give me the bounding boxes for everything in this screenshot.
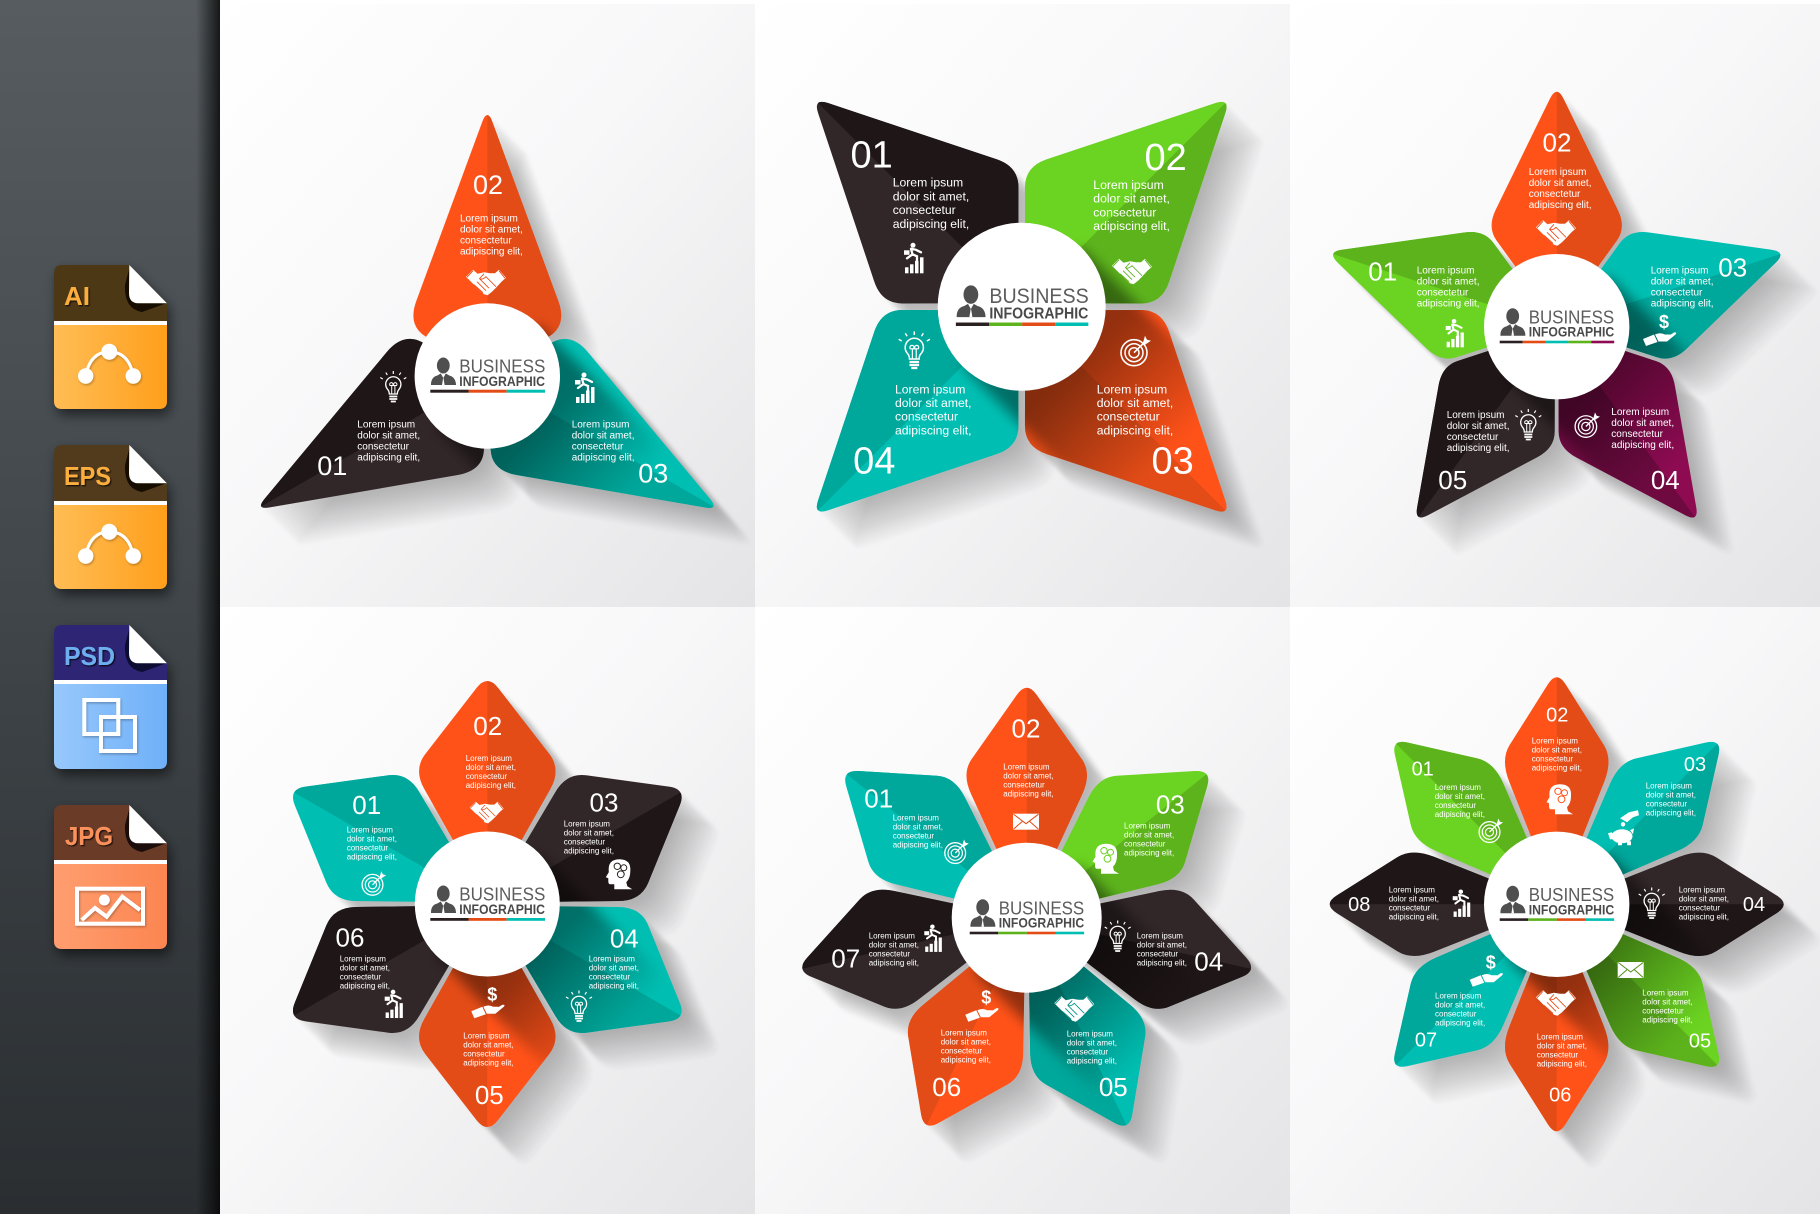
step 01: dolor sit amet, [357,430,420,441]
step 02: consectetur [1003,780,1045,789]
center badge [938,223,1106,391]
petal 02 [1505,677,1608,901]
petal 03 [456,733,715,962]
step 03: consectetur [1646,799,1687,808]
step 05: consectetur [1642,1007,1684,1016]
step 01: dolor sit amet, [1417,276,1480,287]
step 04: dolor sit amet, [589,963,639,972]
step 05: Lorem ipsum [1447,410,1505,421]
step 08: 08 [1348,894,1370,916]
step 05: adipiscing elit, [463,1058,514,1067]
step 05: dolor sit amet, [1447,421,1510,432]
step 03: consectetur [572,441,624,452]
step 03 [1608,754,1706,845]
step 06: adipiscing elit, [1537,1059,1587,1068]
diagram: 6 steps [293,681,715,1160]
step 02: Lorem ipsum [1003,762,1050,771]
petal 05 [1366,291,1608,555]
step 07: dolor sit amet, [1435,1001,1485,1010]
petal 07 [789,860,1037,1028]
petal 06 [1505,907,1608,1131]
step 06 [1536,990,1587,1107]
step 01: dolor sit amet, [347,834,397,843]
panel background: 6 steps [220,607,755,1214]
center badge: BUSINESS [989,284,1089,308]
petal 05 [974,894,1181,1151]
step 04: Lorem ipsum [589,954,635,963]
petal 06 [260,846,519,1075]
step 02 [1529,128,1592,246]
step 02: 02 [1012,714,1040,744]
petal 01 [224,312,524,571]
step 01: adipiscing elit, [1417,298,1480,309]
step 07: Lorem ipsum [1435,992,1482,1001]
center badge: INFOGRAPHIC [1529,902,1614,917]
step 05: adipiscing elit, [1447,443,1510,454]
step 06: Lorem ipsum [941,1029,987,1038]
step 02: adipiscing elit, [466,781,516,790]
petal 02 [419,681,556,901]
file icon: AI: AI [64,281,90,311]
step 02: Lorem ipsum [1529,167,1587,178]
step 01 [347,790,397,895]
step 06 [932,988,999,1102]
step 01 [864,784,969,864]
step 03: 03 [1152,440,1194,482]
step 01: adipiscing elit, [1435,810,1485,819]
step 01: adipiscing elit, [347,852,397,861]
step 04: consectetur [1679,903,1720,912]
step 03 [564,788,632,889]
step 06: dolor sit amet, [340,963,390,972]
diagram: 7 steps [802,688,1284,1159]
step 01 [1368,257,1480,347]
step 04: dolor sit amet, [1137,941,1187,950]
step 06: 06 [932,1072,961,1102]
center badge [415,303,560,449]
file icon: JPG: JPG [65,821,113,851]
file icon: JPG [54,805,167,949]
step 02: 02 [1546,705,1568,727]
step 02: adipiscing elit, [1003,789,1054,798]
step 06: Lorem ipsum [1537,1032,1583,1041]
step 02 [460,170,523,295]
step 04: adipiscing elit, [1137,959,1187,968]
step 01: consectetur [893,203,956,217]
petal 06 [873,894,1080,1151]
step 03: consectetur [1124,840,1166,849]
step 01 [851,134,969,273]
step 01: consectetur [1417,287,1469,298]
step 03: Lorem ipsum [1124,822,1171,831]
step 01: 01 [851,134,893,176]
petal 03 [1522,707,1754,939]
petal 02 [413,115,561,376]
step 03: 03 [590,788,618,818]
petal 05 [1522,870,1754,1101]
step 05: 05 [1689,1030,1711,1052]
step 01: 01 [864,784,893,814]
step 02: Lorem ipsum [460,214,518,225]
step 05 [1618,962,1711,1052]
step 02: dolor sit amet, [460,225,523,236]
step 04 [1105,920,1223,977]
step 06: consectetur [340,972,381,981]
step 02: 02 [473,711,502,741]
center badge: BUSINESS [459,356,545,377]
step 07: dolor sit amet, [869,941,919,950]
center badge: INFOGRAPHIC [459,902,545,917]
step 02: adipiscing elit, [460,247,523,258]
step 04: adipiscing elit, [1679,912,1729,921]
step 01: consectetur [1435,801,1476,810]
step 02: consectetur [460,236,512,247]
step 07 [1415,953,1503,1052]
petal 04 [1560,853,1784,956]
step 04 [1575,407,1680,495]
step 02: consectetur [1532,755,1573,764]
petal 01 [1313,192,1574,388]
diagram: 5 steps [1333,92,1812,550]
step 03: 03 [1156,789,1185,819]
center badge: BUSINESS [459,884,545,905]
step 02: dolor sit amet, [1532,746,1582,755]
step 03 [1097,336,1194,482]
step 06: 06 [1549,1085,1571,1107]
petal 03 [450,312,750,571]
step 02: 02 [1543,128,1571,158]
step 03: adipiscing elit, [1651,298,1714,309]
step 01: Lorem ipsum [893,814,939,823]
step 04: 04 [1651,465,1680,495]
step 01: dolor sit amet, [893,189,969,203]
step 05: 05 [1099,1072,1128,1102]
step 04: consectetur [895,410,958,424]
step 06: dolor sit amet, [941,1038,991,1047]
step 05: dolor sit amet, [1642,998,1693,1007]
petal 03 [961,246,1290,575]
step 01: dolor sit amet, [893,823,943,832]
step 03 [1092,789,1185,874]
step 04: 04 [853,440,895,482]
step 04 [1639,885,1765,921]
step 06: consectetur [1537,1050,1578,1059]
panel background: 8 steps [1290,607,1820,1214]
step 04: dolor sit amet, [895,396,972,410]
diagram: 4 steps [816,102,1260,545]
step 04: Lorem ipsum [1611,407,1669,418]
step 01: 01 [317,451,347,481]
petal 03 [991,727,1244,963]
step 08: consectetur [1389,903,1430,912]
step 08 [1348,885,1470,921]
step 01: Lorem ipsum [347,825,393,834]
step 07: adipiscing elit, [1435,1019,1485,1028]
step 03: 03 [638,458,668,488]
petal 04 [754,246,1082,575]
step 07: consectetur [869,950,910,959]
step 03: adipiscing elit, [1646,808,1696,817]
step 02: consectetur [1093,205,1156,219]
step 04: adipiscing elit, [589,981,639,990]
step 01: 01 [1412,758,1434,780]
step 03: adipiscing elit, [1124,849,1174,858]
petal 08 [1330,853,1554,956]
step 02: adipiscing elit, [1529,200,1592,211]
step 05 [1054,996,1128,1102]
step 03: adipiscing elit, [564,847,614,856]
petal 02 [961,39,1290,367]
step 04: dolor sit amet, [1611,418,1674,429]
step 03: dolor sit amet, [572,430,635,441]
file icon: AI [54,265,167,409]
step 04: consectetur [1137,950,1178,959]
petal 02 [1492,92,1622,324]
step 03: adipiscing elit, [1097,423,1173,437]
step 03: Lorem ipsum [1097,382,1167,396]
step 03: 03 [1718,253,1747,283]
step 04: adipiscing elit, [1611,440,1674,451]
step 08: dolor sit amet, [1389,894,1439,903]
petal 04 [1016,860,1264,1028]
step 02 [1003,714,1054,830]
step 03: consectetur [1651,287,1703,298]
step 05: consectetur [1067,1048,1108,1057]
center badge: BUSINESS [999,897,1084,918]
step 07 [831,924,942,974]
step 05 [1438,409,1541,495]
step 06 [336,923,403,1018]
step 01: consectetur [347,843,388,852]
step 04: 04 [1194,947,1223,977]
step 03 [1643,253,1747,346]
step 06: adipiscing elit, [941,1056,991,1065]
step 06: Lorem ipsum [340,954,386,963]
step 04: Lorem ipsum [1137,932,1183,941]
step 02: dolor sit amet, [1003,771,1054,780]
step 02: dolor sit amet, [466,763,516,772]
panel background: 3 steps [220,4,755,607]
step 07: Lorem ipsum [869,932,915,941]
step 04: adipiscing elit, [895,423,972,437]
center badge: BUSINESS [1529,884,1614,905]
step 03: Lorem ipsum [1651,265,1709,276]
step 02 [466,711,516,823]
step 08: adipiscing elit, [1389,912,1439,921]
step 05: Lorem ipsum [463,1031,510,1040]
step 02: consectetur [1529,189,1581,200]
step 01: consectetur [893,832,934,841]
step 05: Lorem ipsum [1642,989,1689,998]
petal 01 [1360,707,1591,939]
step 03: Lorem ipsum [572,419,630,430]
step 06: consectetur [941,1047,982,1056]
step 06: adipiscing elit, [340,981,390,990]
step 01: dolor sit amet, [1435,792,1485,801]
diagram: 3 steps [261,115,746,542]
step 01: adipiscing elit, [357,452,420,463]
step 01: Lorem ipsum [893,176,963,190]
center badge [1484,832,1629,977]
petal 07 [1360,870,1591,1101]
step 02: adipiscing elit, [1093,219,1170,233]
step 05: consectetur [463,1049,505,1058]
step 02: adipiscing elit, [1532,764,1582,773]
step 01: Lorem ipsum [357,419,415,430]
step 01 [317,371,420,481]
center badge: INFOGRAPHIC [459,374,545,389]
step 04: consectetur [1611,429,1664,440]
panel background: 7 steps [755,607,1290,1214]
diagram: 8 steps [1330,677,1820,1167]
step 04: 04 [1743,894,1765,916]
step 08: Lorem ipsum [1389,885,1435,894]
file icon: PSD [54,625,167,769]
step 02: 02 [1145,137,1187,179]
step 03: consectetur [564,838,605,847]
step 05: dolor sit amet, [463,1040,514,1049]
step 07: consectetur [1435,1010,1477,1019]
step 03: dolor sit amet, [564,829,614,838]
file icon: EPS: EPS [64,461,111,491]
step 05 [463,984,514,1110]
center badge: BUSINESS [1529,306,1614,327]
step 07: adipiscing elit, [869,959,919,968]
step 01: Lorem ipsum [1435,783,1481,792]
step 03: 03 [1684,754,1706,776]
step 06: dolor sit amet, [1537,1041,1587,1050]
sidebar [0,0,220,1214]
panel background: 5 steps [1290,4,1820,607]
step 02: dolor sit amet, [1529,178,1592,189]
step 02: consectetur [466,772,507,781]
step 03: dolor sit amet, [1646,790,1696,799]
panel background: 4 steps [755,4,1290,607]
step 05: 05 [475,1080,504,1110]
petal 01 [809,727,1062,963]
step 03: consectetur [1097,410,1160,424]
step 03: adipiscing elit, [572,452,635,463]
petal 04 [456,846,715,1075]
petal 01 [754,39,1082,367]
step 02: Lorem ipsum [1093,178,1164,192]
center badge [1484,254,1629,399]
step 05: 05 [1438,465,1467,495]
step 01 [1412,758,1503,842]
center badge: INFOGRAPHIC [999,916,1084,931]
step 02: dolor sit amet, [1093,192,1170,206]
step 01: 01 [352,790,381,820]
step 01: Lorem ipsum [1417,265,1475,276]
petal 04 [1506,291,1748,555]
step 05: Lorem ipsum [1067,1030,1113,1039]
center badge: INFOGRAPHIC [989,305,1089,322]
step 04: 04 [610,923,639,953]
step 01: 01 [1368,257,1397,287]
petal 01 [260,733,519,962]
step 03: dolor sit amet, [1124,831,1174,840]
center badge: INFOGRAPHIC [1529,325,1614,340]
step 02 [1532,705,1582,814]
step 02 [1093,137,1187,284]
step 05: dolor sit amet, [1067,1039,1117,1048]
petal 05 [419,907,556,1127]
step 06: 06 [336,923,364,953]
petal 02 [966,688,1087,915]
step 03 [572,372,668,488]
step 02: Lorem ipsum [466,754,512,763]
step 03: Lorem ipsum [1646,781,1692,790]
step 07: 07 [1415,1030,1437,1052]
step 01: consectetur [357,441,410,452]
step 03: dolor sit amet, [1651,276,1714,287]
step 04: Lorem ipsum [895,382,965,396]
step 02: 02 [473,170,503,200]
center badge [415,832,560,976]
step 02: Lorem ipsum [1532,737,1578,746]
petal 03 [1539,192,1800,388]
step 01: adipiscing elit, [893,841,943,850]
step 05: adipiscing elit, [1067,1057,1117,1066]
file icon: PSD: PSD [64,641,115,671]
step 05: consectetur [1447,432,1499,443]
step 04 [566,923,639,1021]
step 07: 07 [831,944,860,974]
step 04: consectetur [589,972,630,981]
step 03: dolor sit amet, [1097,396,1173,410]
center badge [952,843,1102,993]
step 04: dolor sit amet, [1679,894,1729,903]
step 01: adipiscing elit, [893,217,969,231]
step 05: adipiscing elit, [1642,1016,1693,1025]
file icon: EPS [54,445,167,589]
step 03: Lorem ipsum [564,820,610,829]
step 04: Lorem ipsum [1679,885,1725,894]
step 04 [853,331,972,482]
